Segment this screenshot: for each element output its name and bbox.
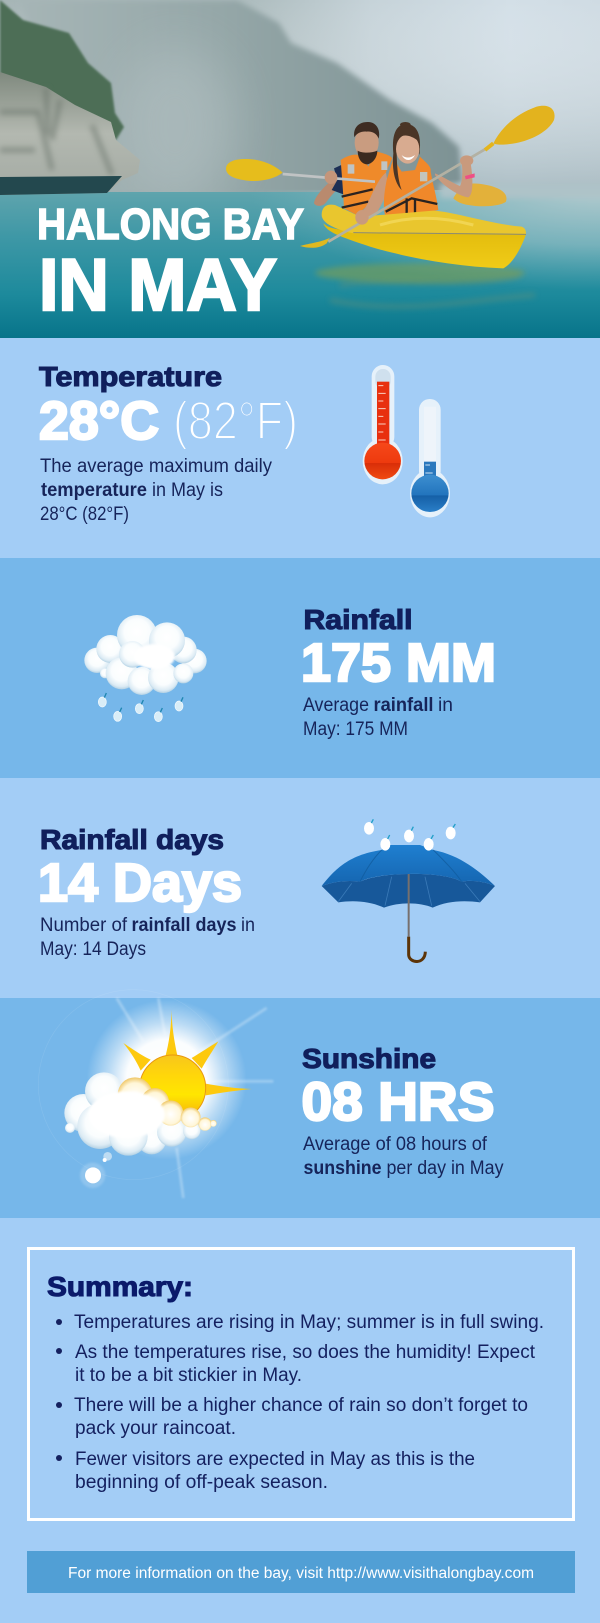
heading: Rainfall days <box>40 824 224 855</box>
description: rainfall days <box>132 915 236 936</box>
description <box>303 695 453 740</box>
description: temperature <box>41 480 147 501</box>
panel: temperature <box>0 338 600 558</box>
title: HALONG BAY <box>37 200 304 249</box>
bullet list: beginning of off-peak season. <box>75 1472 328 1493</box>
rain drops <box>364 822 456 851</box>
water ripples <box>330 275 535 306</box>
shaft and handle <box>409 937 425 961</box>
description: rainfall <box>374 695 434 716</box>
description: in May is <box>152 480 223 501</box>
paddle front of man <box>226 159 283 181</box>
stat value: 175 MM <box>301 633 496 693</box>
sun rays <box>123 1010 252 1095</box>
description: sunshine <box>304 1158 382 1179</box>
description: in <box>241 915 255 936</box>
bullet list: pack your raincoat. <box>75 1418 236 1439</box>
bullet list: Temperatures are rising in May; summer is in full swing. <box>74 1312 544 1333</box>
cloud <box>64 1072 217 1156</box>
glow <box>87 1000 247 1160</box>
kayak hull <box>323 223 526 268</box>
sun disc <box>140 1055 206 1121</box>
panel: hero photo <box>0 0 600 338</box>
footer bar: For more information on the bay, visit http://www.visithalongbay.com <box>68 1565 534 1582</box>
hands <box>355 210 369 225</box>
description: per day in May <box>386 1158 504 1179</box>
description: in <box>438 695 453 716</box>
rain drops <box>98 697 183 722</box>
bullet list: There will be a higher chance of rain so don’t forget to <box>74 1395 528 1416</box>
icon: thermometers <box>363 365 450 517</box>
bullet list <box>56 1312 544 1493</box>
woman <box>435 163 472 197</box>
title: IN MAY <box>39 245 277 326</box>
front paddle <box>300 238 330 248</box>
canopy underside <box>322 874 495 908</box>
bullet list: Fewer visitors are expected in May as this is the <box>75 1449 475 1470</box>
description <box>303 1134 504 1179</box>
panel: rainfall <box>0 558 600 778</box>
icon: sun behind cloud <box>38 990 273 1198</box>
panel: rainfall days <box>0 778 600 998</box>
description: Average <box>303 695 369 716</box>
small cloud puffs <box>80 1152 112 1188</box>
description: Number of <box>40 915 128 936</box>
summary heading: Summary: <box>47 1271 193 1302</box>
bullet list: As the temperatures rise, so does the humidity! Expect <box>75 1342 536 1363</box>
stat value: 14 Days <box>38 853 242 913</box>
description <box>40 915 255 960</box>
heading: Sunshine <box>302 1043 436 1074</box>
blue thermometer <box>410 399 450 517</box>
description: May: 175 MM <box>303 719 408 740</box>
icon: umbrella <box>322 819 495 961</box>
stat value celsius: 28°C <box>39 391 159 451</box>
description <box>40 456 272 525</box>
description: 28°C (82°F) <box>40 504 129 525</box>
red thermometer <box>363 365 403 484</box>
bullet list: it to be a bit stickier in May. <box>75 1365 302 1386</box>
heading: Rainfall <box>304 604 412 635</box>
title <box>37 200 304 326</box>
heading: Temperature <box>39 361 222 392</box>
stat value: 08 HRS <box>302 1072 494 1132</box>
summary box <box>28 1248 574 1520</box>
wristband <box>465 173 475 179</box>
paddle back <box>453 184 507 206</box>
stat value fahrenheit: (82°F) <box>173 391 298 451</box>
man <box>314 177 340 206</box>
description: The average maximum daily <box>40 456 272 477</box>
panel: sunshine <box>0 990 600 1218</box>
kayakers <box>226 106 555 268</box>
distant misty mountain <box>20 0 462 195</box>
panel: summary section <box>0 1218 600 1623</box>
description: Average of 08 hours of <box>303 1134 488 1155</box>
limestone cliff <box>0 0 140 195</box>
mist over mountain <box>115 45 235 205</box>
canopy top <box>322 845 495 886</box>
description: May: 14 Days <box>40 939 146 960</box>
water <box>0 192 600 338</box>
footer bar <box>27 1551 575 1593</box>
icon: rain cloud <box>84 615 207 722</box>
